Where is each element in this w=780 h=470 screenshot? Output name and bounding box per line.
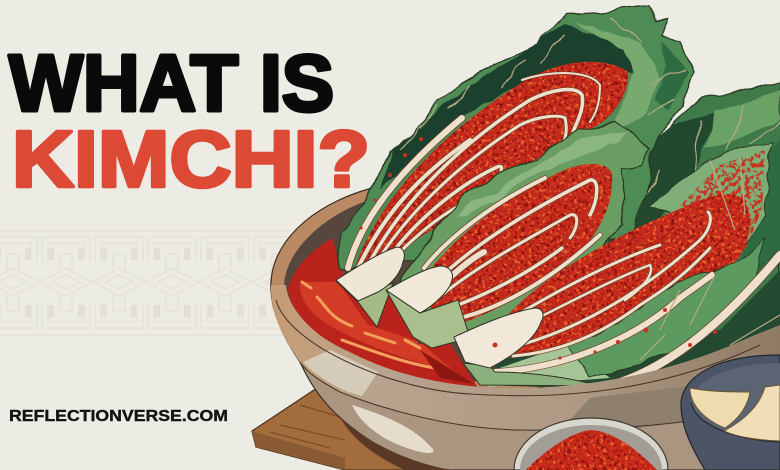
cabbage 2 base wedge xyxy=(386,266,470,348)
bowl body highlight xyxy=(352,405,433,453)
illustration: kimchi bowl xyxy=(252,7,780,470)
bowl body xyxy=(300,362,780,470)
red flakes on leaf xyxy=(680,150,765,250)
gochujang sauce xyxy=(288,238,478,388)
right edge leaf underlay xyxy=(730,88,780,345)
small bowl of chili flakes xyxy=(514,418,668,470)
title: WHAT IS: WHAT IS xyxy=(9,38,334,128)
cabbage 1 xyxy=(338,7,693,268)
decorative Korean meander pattern band xyxy=(0,230,290,336)
wooden board xyxy=(252,390,780,470)
bowl front rim xyxy=(271,285,780,431)
stems xyxy=(348,73,600,268)
grey bowl of garlic xyxy=(681,355,780,470)
bowl shadow xyxy=(340,417,450,470)
leaf ribs xyxy=(640,158,780,365)
back light leaf xyxy=(650,143,773,245)
cabbage 3 xyxy=(480,140,780,390)
cabbage 2 xyxy=(398,123,650,345)
ruffled green leaf xyxy=(567,240,765,378)
dark interior xyxy=(380,24,640,190)
leaf xyxy=(398,123,650,345)
cabbage 3 back leaf xyxy=(600,85,780,345)
red dots on stem xyxy=(359,137,423,230)
cabbage 3 base wedge xyxy=(454,308,600,386)
title: KIMCHI?: KIMCHI? xyxy=(12,114,370,204)
outer leaf xyxy=(338,7,693,268)
lower dark leaf xyxy=(480,270,780,390)
red dots on stems xyxy=(558,308,717,360)
lower light leaf xyxy=(488,345,610,387)
red filling xyxy=(490,194,750,358)
garlic clove xyxy=(690,388,750,428)
garlic clove xyxy=(724,385,780,441)
website label: REFLECTIONVERSE.COM xyxy=(9,408,228,425)
cabbage 1 base wedge xyxy=(336,247,404,327)
light leaf fold xyxy=(575,22,660,135)
dark leaf shading xyxy=(655,40,688,110)
red filling xyxy=(418,164,612,328)
side leaf xyxy=(740,140,780,300)
bowl back rim and interior xyxy=(271,188,780,400)
red filling xyxy=(356,62,628,264)
stems xyxy=(495,212,780,388)
red dot xyxy=(492,342,498,348)
leaf ribs xyxy=(400,18,685,150)
stems xyxy=(424,178,600,322)
bowl inner wall xyxy=(284,198,600,385)
